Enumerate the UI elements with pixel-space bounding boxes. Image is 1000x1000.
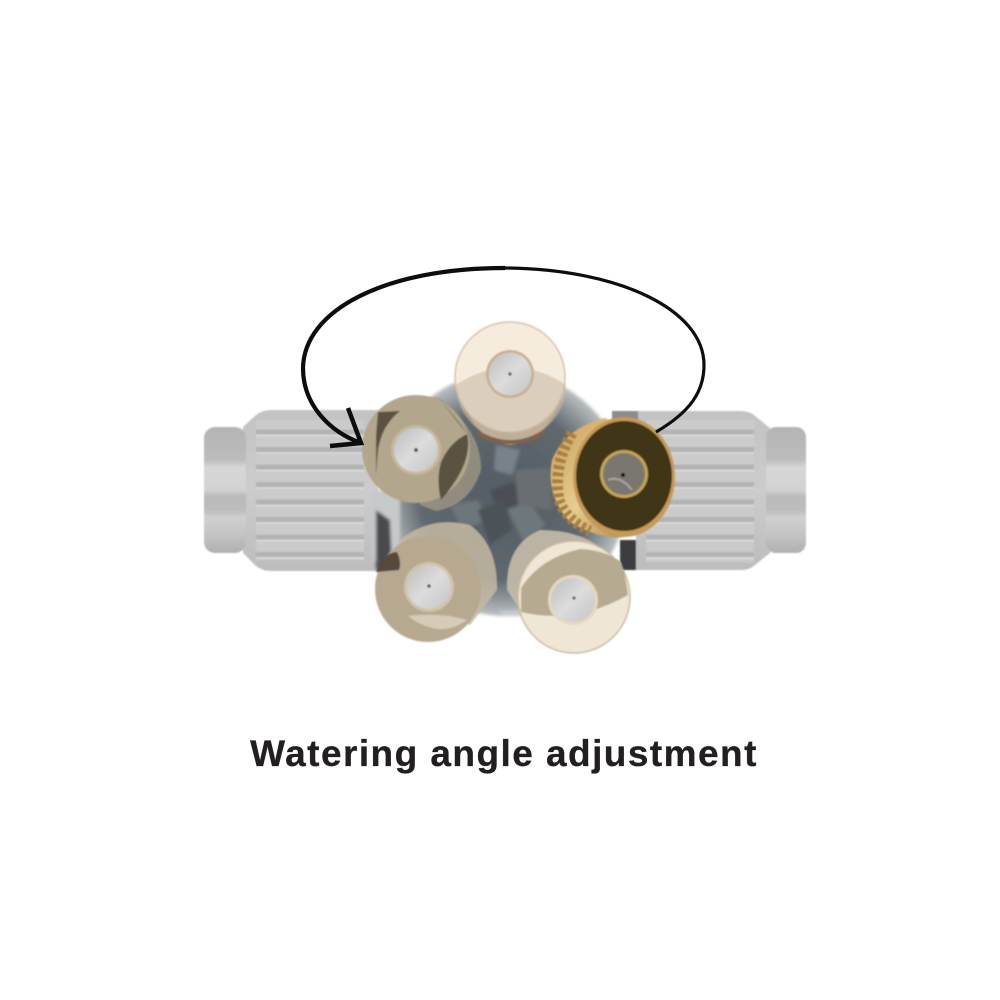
faded nozzle: left: [362, 395, 481, 511]
left connector: [204, 410, 378, 571]
orifice: [508, 372, 512, 376]
caption: Watering angle adjustment: [250, 733, 758, 774]
orifice: [427, 584, 431, 588]
left connector cap: [204, 427, 246, 553]
orifice: [572, 596, 576, 600]
faded nozzle: bottom left: [375, 522, 497, 642]
orifice: [414, 448, 418, 452]
rotation arrow: [303, 268, 704, 446]
faded nozzle: top: [455, 322, 566, 445]
faded nozzle: bottom right: [507, 530, 630, 653]
right connector body: [636, 411, 770, 570]
central hub: [372, 372, 627, 616]
brass nozzle: right: [550, 417, 675, 537]
orifice: [621, 473, 625, 477]
right connector cap: [766, 427, 806, 553]
left connector body: [243, 410, 378, 571]
right connector: [612, 411, 806, 570]
